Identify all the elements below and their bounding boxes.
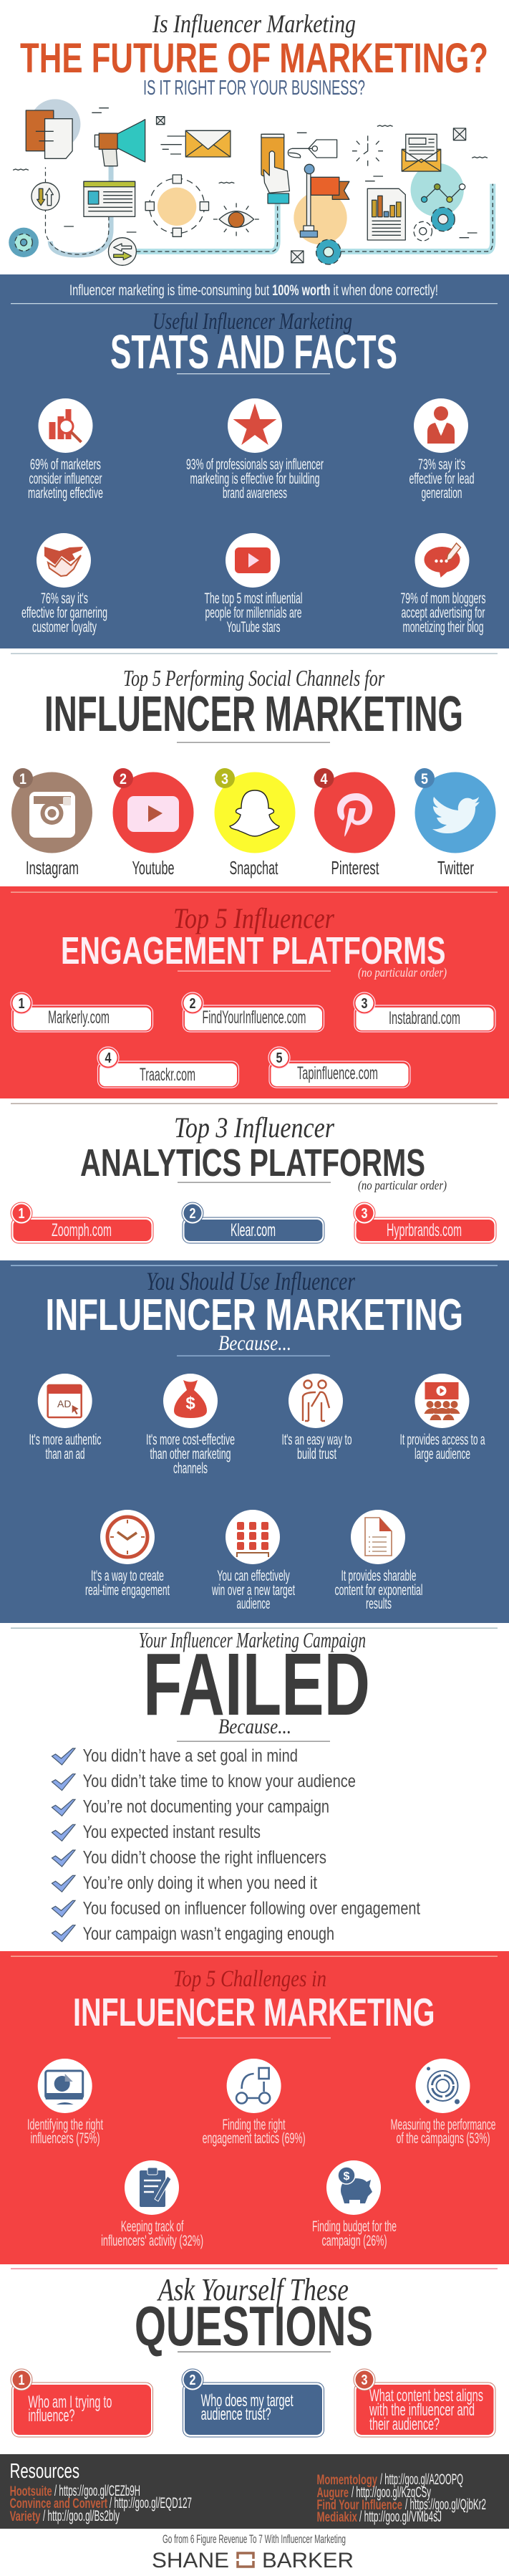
reason: cost effective: [146, 1374, 235, 1477]
panel: analytics platforms: [11, 1103, 498, 1243]
price tag: [288, 140, 337, 158]
line graph: [422, 184, 465, 202]
reason: real-time: [85, 1510, 170, 1599]
stat: youtube stars: The top 5 most influential: [205, 590, 302, 607]
panel: why use influencer marketing: [0, 1260, 509, 1623]
platform: Hyprbrands: 3: [361, 1206, 368, 1222]
footer: [152, 2532, 354, 2572]
subtitle: IS IT RIGHT FOR YOUR BUSINESS?: [143, 77, 365, 100]
heading script: Top 5 Challenges in: [173, 1966, 326, 1992]
wordmark: SHANE: [152, 2549, 229, 2572]
eye: [213, 203, 259, 236]
stat: lead generation: generation: [421, 485, 462, 502]
crossed boxes: [157, 117, 466, 263]
challenge: tracking activity: Keeping track of: [121, 2218, 183, 2235]
heading script: Your Influencer Marketing Campaign: [139, 1627, 366, 1652]
channel: twitter: 5: [421, 771, 428, 787]
stat: lead generation: [409, 398, 474, 502]
reason: sharable content: content for exponential: [335, 1582, 422, 1599]
reason: sharable content: It provides sharable: [341, 1568, 417, 1584]
note: (no particular order): [358, 1178, 447, 1193]
stat: loyalty: [21, 533, 107, 636]
documents: [26, 110, 72, 158]
heading script: You Should Use Influencer: [146, 1267, 356, 1296]
script title: Is Influencer Marketing: [152, 9, 356, 38]
reason: real-time: It's a way to create: [91, 1568, 164, 1584]
left source list: Variety: [10, 2509, 41, 2524]
stat: mom bloggers: [401, 533, 485, 636]
platform: Traackr: Traackr.com: [140, 1065, 195, 1085]
reason: target audience: audience: [236, 1596, 271, 1612]
heading script: Useful Influencer Marketing: [152, 309, 352, 335]
right source list: / http://goo.gl/KzqCSy: [352, 2484, 431, 2501]
platform: Tapinfluence: 5: [276, 1050, 282, 1066]
reason: target audience: [211, 1510, 295, 1612]
platform: Klear: 2: [189, 1206, 196, 1222]
channel: snapchat: Snapchat: [229, 857, 278, 878]
stat: youtube stars: people for millennials are: [205, 605, 302, 621]
item 4: [52, 1822, 261, 1842]
channel: snapchat: 3: [221, 771, 228, 787]
reason: authentic: than an ad: [46, 1446, 84, 1462]
channel: pinterest: [314, 768, 395, 878]
report chart: [367, 188, 405, 240]
question 1: [11, 2369, 153, 2437]
challenge: identifying influencers: influencers (75%): [30, 2130, 100, 2147]
platform: Instabrand: Instabrand.com: [389, 1008, 460, 1028]
swap arrow badges: [31, 183, 136, 265]
panel: stats and facts: [0, 274, 509, 648]
channel: instagram: Instagram: [26, 857, 79, 878]
stat: loyalty: customer loyalty: [32, 619, 97, 636]
item 5: You didn’t choose the right influencers: [83, 1848, 326, 1868]
challenge: engagement tactics: engagement tactics (69%): [203, 2130, 306, 2147]
platform: FindYourInfluence: [182, 992, 324, 1032]
network circle: [145, 175, 209, 236]
platform: Tapinfluence: Tapinfluence.com: [297, 1063, 378, 1083]
note: (no particular order): [358, 965, 447, 980]
reason: target audience: You can effectively: [217, 1568, 290, 1584]
right source list: Mediakix: [316, 2510, 357, 2525]
megaphone: [94, 120, 145, 166]
left source list: / http://goo.gl/EQD127: [110, 2495, 192, 2512]
reason: trust: build trust: [297, 1446, 336, 1462]
clock: [352, 135, 383, 166]
question 3: their audience?: [369, 2415, 440, 2434]
heading script: Top 3 Influencer: [174, 1111, 334, 1144]
item 8: Your campaign wasn’t engaging enough: [83, 1924, 334, 1944]
stat: professionals: [186, 398, 324, 502]
item 6: You’re only doing it when you need it: [83, 1873, 317, 1893]
question 2: [182, 2369, 324, 2437]
channel: snapchat: [215, 768, 295, 878]
platform: Traackr: [97, 1047, 239, 1088]
reason: cost effective: channels: [173, 1460, 208, 1477]
panel: hero header: [9, 9, 493, 265]
challenge: tracking activity: influencers' activity (32%): [101, 2233, 203, 2249]
panel: social channels: [11, 665, 495, 878]
platform: Markerly: [11, 992, 153, 1032]
stat: professionals: marketing is effective for building: [190, 471, 319, 487]
panel: questions: [11, 2269, 498, 2437]
heading: FAILED: [143, 1636, 370, 1734]
open envelope: [402, 134, 441, 171]
channel: twitter: Twitter: [437, 857, 474, 878]
left source list: Convince and Convert: [10, 2496, 107, 2512]
challenge: finding budget: campaign (26%): [322, 2233, 387, 2249]
envelope: [160, 130, 231, 157]
resources heading: Resources: [10, 2460, 79, 2483]
tagline: Go from 6 Figure Revenue To 7 With Influencer Marketing: [163, 2532, 346, 2546]
right source list: Augure: [316, 2486, 349, 2501]
reason: large audience: [399, 1374, 485, 1462]
channel: twitter: [415, 768, 495, 878]
channel: youtube: 2: [120, 771, 127, 787]
platform: Hyprbrands: [354, 1202, 496, 1243]
heading script: Top 5 Performing Social Channels for: [123, 665, 384, 691]
stat: professionals: 93% of professionals say influencer: [186, 456, 324, 473]
phone and hand: [261, 134, 289, 204]
reason: cost effective: It's more cost-effective: [146, 1432, 235, 1448]
reason: sharable content: results: [366, 1596, 392, 1612]
platform: Klear: Klear.com: [231, 1220, 276, 1240]
reason: target audience: win over a new target: [211, 1582, 295, 1599]
challenge: measuring performance: [391, 2059, 495, 2147]
platform: Zoomph: [11, 1202, 153, 1243]
challenge: finding budget: [312, 2160, 397, 2249]
item 4: You expected instant results: [83, 1822, 261, 1842]
heading script: Ask Yourself These: [157, 2272, 349, 2307]
stat: professionals: brand awareness: [223, 485, 287, 502]
reason list: [52, 1746, 420, 1944]
item 7: You focused on influencer following over engagement: [83, 1899, 420, 1919]
item 3: You’re not documenting your campaign: [83, 1796, 329, 1816]
because: Because...: [218, 1331, 291, 1355]
platform: Tapinfluence: [268, 1047, 410, 1088]
challenge: finding budget: Finding budget for the: [312, 2218, 397, 2235]
stat: loyalty: 76% say it's: [41, 590, 88, 607]
panel: engagement platforms: [0, 886, 509, 1098]
item 1: You didn’t have a set goal in mind: [83, 1746, 298, 1766]
stat: marketers: [28, 398, 103, 502]
browser window: [84, 181, 135, 216]
question 2: 2: [189, 2372, 196, 2388]
channel: instagram: [11, 768, 92, 878]
platform: Instabrand: [354, 992, 495, 1032]
channel: pinterest: 4: [321, 771, 328, 787]
question 1: 1: [19, 2372, 24, 2388]
panel: challenges: [0, 1951, 509, 2264]
question 1: influence?: [28, 2406, 74, 2426]
wordmark: BARKER: [262, 2549, 354, 2572]
panel: resources: [0, 2454, 509, 2529]
flag: [300, 164, 349, 237]
platform: Zoomph: Zoomph.com: [52, 1220, 112, 1240]
stat: lead generation: 73% say it's: [418, 456, 465, 473]
channel: youtube: Youtube: [132, 857, 175, 878]
stat: marketers: 69% of marketers: [30, 456, 101, 473]
channel: instagram: 1: [19, 771, 26, 787]
right source list: Find Your Influence: [316, 2498, 402, 2513]
reason: authentic: It's more authentic: [29, 1432, 102, 1448]
reason: authentic: [29, 1374, 102, 1462]
reason: real-time: real-time engagement: [85, 1582, 170, 1599]
question 2: Who does my target: [201, 2391, 294, 2410]
reason: cost effective: than other marketing: [150, 1446, 231, 1462]
challenge: identifying influencers: [27, 2059, 103, 2147]
question 1: Who am I trying to: [28, 2393, 112, 2412]
stat: youtube stars: [205, 533, 302, 636]
channel: youtube: [113, 768, 193, 878]
left source list: [10, 2483, 192, 2524]
question 2: audience trust?: [201, 2405, 271, 2424]
platform: Traackr: 4: [105, 1050, 112, 1066]
intro line: Influencer marketing is time-consuming but 100% worth it when done correctly!: [69, 282, 438, 299]
gears: [9, 207, 455, 264]
platform: Markerly: 1: [19, 996, 24, 1012]
reason: sharable content: [335, 1510, 422, 1612]
question 3: [354, 2369, 495, 2437]
challenge: engagement tactics: [203, 2059, 306, 2147]
left source list: / http://goo.gl/Bs2bly: [43, 2508, 120, 2524]
platform: Instabrand: 3: [361, 996, 368, 1012]
stat: loyalty: effective for garnering: [21, 605, 107, 621]
because: Because...: [218, 1715, 291, 1738]
right source list: [316, 2471, 486, 2525]
challenge: tracking activity: [101, 2160, 203, 2249]
stat: marketers: consider influencer: [29, 471, 102, 487]
item 2: You didn’t take time to know your audience: [83, 1771, 356, 1791]
question 3: 3: [361, 2372, 368, 2388]
left source list: / https://goo.gl/CEZb9H: [54, 2483, 140, 2499]
logo mark: [238, 2553, 253, 2567]
challenge: finding budget: $: [344, 2170, 350, 2183]
reason: trust: [282, 1374, 352, 1462]
left source list: Hootsuite: [10, 2484, 52, 2499]
platform: Zoomph: 1: [19, 1206, 24, 1222]
reason: trust: It's an easy way to: [282, 1432, 352, 1448]
platform: Markerly: Markerly.com: [48, 1007, 110, 1028]
panel: campaign failed: [52, 1627, 420, 1944]
stat: marketers: marketing effective: [28, 485, 103, 502]
channel: pinterest: Pinterest: [331, 857, 379, 878]
challenge: engagement tactics: Finding the right: [223, 2117, 286, 2133]
illustration: marketing flow: [9, 99, 493, 265]
stat: youtube stars: YouTube stars: [226, 619, 281, 636]
platform: FindYourInfluence: 2: [189, 996, 196, 1012]
reason: cost effective: $: [185, 1394, 195, 1413]
platform: FindYourInfluence: FindYourInfluence.com: [202, 1007, 306, 1028]
challenge: identifying influencers: Identifying the right: [27, 2117, 103, 2133]
reason: authentic: AD: [57, 1398, 71, 1409]
heading script: Top 5 Influencer: [173, 902, 334, 934]
right source list: Momentology: [316, 2473, 377, 2488]
heading: QUESTIONS: [135, 2294, 373, 2357]
platform: Klear: [182, 1202, 324, 1243]
right source list: / http://goo.gl/VMb4sJ: [359, 2509, 442, 2525]
